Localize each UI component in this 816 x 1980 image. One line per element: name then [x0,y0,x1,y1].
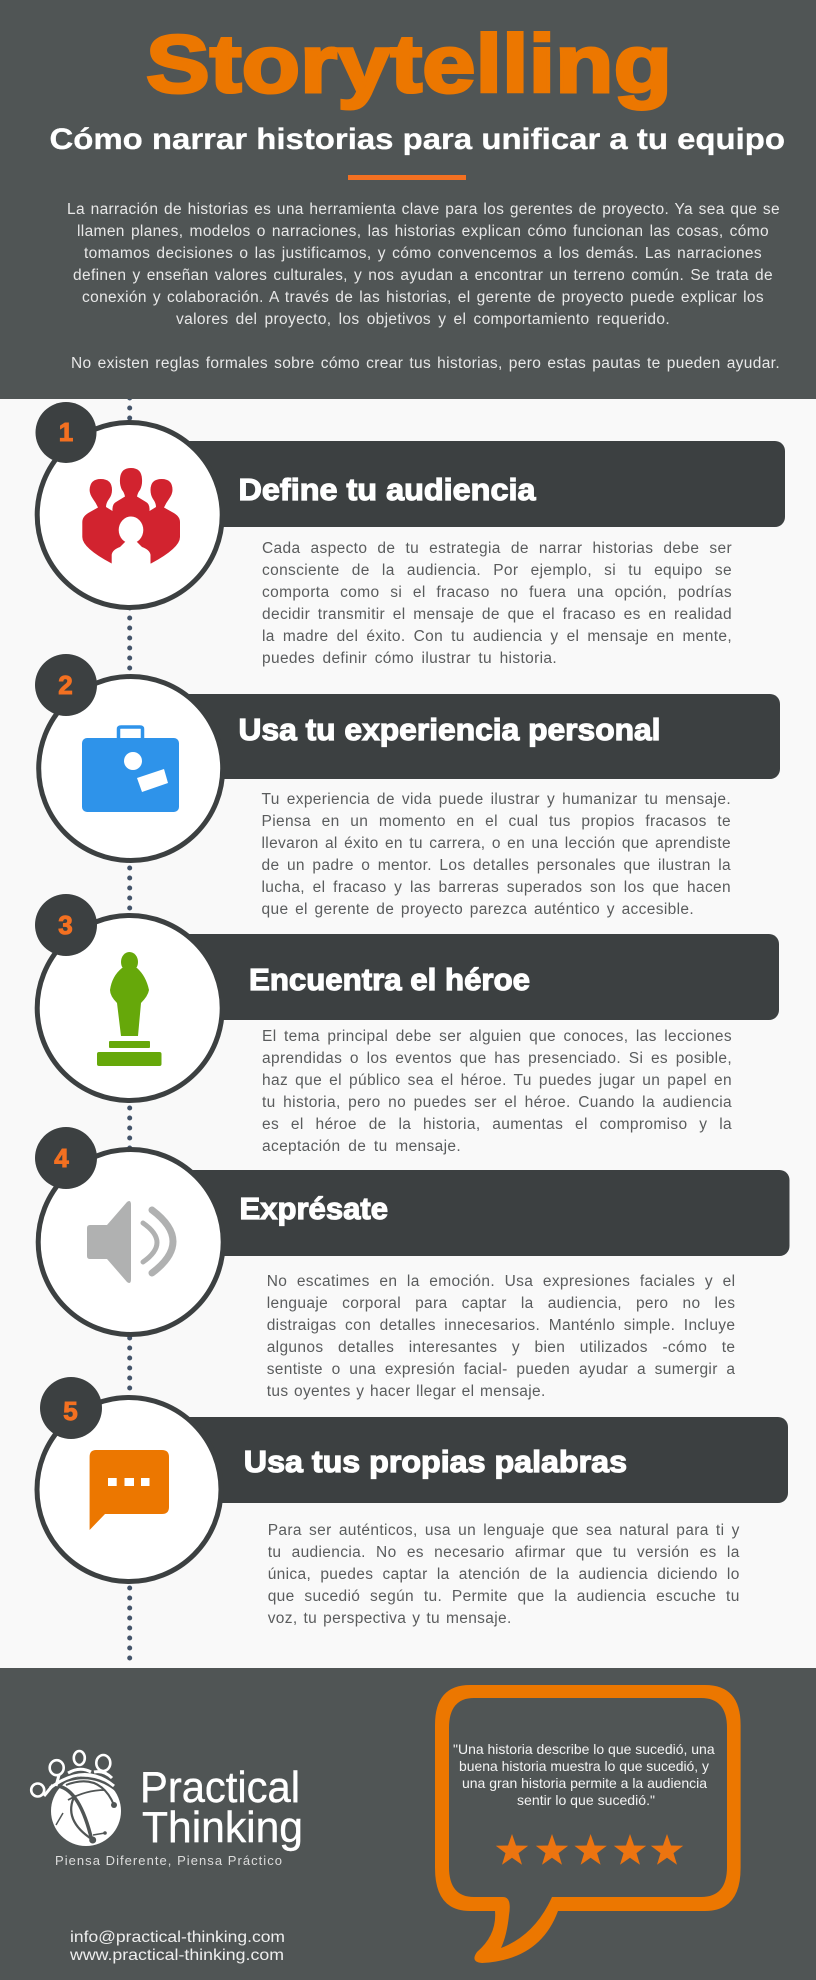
contact details: info@practical-thinking.com [70,1929,285,1946]
intro text: llamen planes, modelos o narraciones, las historias explican cómo funcionan las cosas, cómo [77,223,769,240]
intro text: No existen reglas formales sobre cómo crear tus historias, pero estas pautas te pueden ayudar. [71,355,780,372]
circle 4 [38,1150,223,1334]
text: step 5: que sucedió según tu. Permite que la audiencia escuche tu [268,1588,740,1605]
text: step 4: sentiste o una expresión facial- pueden ayudar a sumergir a [267,1361,735,1378]
text: step 2: Tu experiencia de vida puede ilustrar y humanizar tu mensaje. [262,791,731,808]
text: step 4: distraigas con detalles innecesarios. Manténlo simple. Incluye [267,1317,735,1334]
text: step 4: lenguaje corporal para captar la audiencia, pero no les [267,1295,735,1312]
icon: speaker [87,1201,173,1283]
orange rule [348,175,466,180]
heading bar 5 [150,1417,788,1503]
text: step 3 [262,1028,732,1155]
five stars rating [496,1834,683,1865]
badge 3 [35,894,97,956]
panel: step 2 [35,654,780,918]
text: step 5: voz, tu perspectiva y tu mensaje. [268,1610,512,1627]
contact details: www.practical-thinking.com [69,1947,284,1964]
icon: speech bubble [90,1450,169,1530]
intro text: definen y enseñan valores culturales, y nos ayudan a encontrar un terreno común. Se trata de [73,267,773,284]
text: step 1: comporta como si el fracaso no fuera una opción, podrías [262,584,732,601]
text: step 3: aceptación de tu mensaje. [262,1138,461,1155]
text: step 2: que el gerente de proyecto parezca auténtico y accesible. [262,901,694,918]
text: step 1: puedes definir cómo ilustrar tu historia. [262,650,557,667]
intro text [67,201,780,372]
badge 4: 4 [54,1143,69,1173]
circle 1 [37,422,222,608]
text: step 1 [262,540,732,667]
panel: step 1 [34,402,785,667]
text: step 1: decidir transmitir el mensaje de que el fracaso es en realidad [262,606,732,623]
text: step 4: algunos detalles interesantes y bien utilizados -cómo te [267,1339,735,1356]
logo: Practical Thinking: Thinking [142,1803,303,1852]
icon: audience [82,468,180,565]
text: step 3: haz que el público sea el héroe. Tu puedes jugar un papel en [262,1072,732,1089]
badge 4 [35,1127,97,1189]
subtitle: Cómo narrar historias para unificar a tu equipo [50,123,785,156]
logo: Practical Thinking: Practical [140,1763,300,1812]
badge 2 [35,654,97,716]
text: step 1: la madre del éxito. Con tu audiencia y el mensaje en mente, [262,628,732,645]
panel: step 5 [34,1377,788,1627]
badge 3: 3 [58,910,73,940]
heading: Usa tus propias palabras: Usa tus propias palabras [244,1444,627,1479]
badge 2: 2 [58,670,73,700]
intro text: valores del proyecto, los objetivos y el comportamiento requerido. [176,311,670,328]
heading bar 3 [150,934,779,1020]
badge 5: 5 [63,1396,78,1426]
circle 3 [37,916,222,1100]
panel: steps background with dotted timeline [0,399,816,1668]
quote text: buena historia muestra lo que sucedió, y [459,1758,709,1774]
intro text: conexión y colaboración. A través de las historias, el gerente de proyecto puede explicar los [82,289,764,306]
text: step 3: es el héroe de la historia, aumentas el compromiso y la [262,1116,732,1133]
circle 2 [39,676,223,860]
text: step 3: aprendidas o los eventos que has presenciado. Si es posible, [262,1050,732,1067]
text: step 2: llevaron al éxito en tu carrera, o en una lección que aprendiste [262,835,731,852]
text: step 4 [267,1273,735,1400]
heading: Define tu audiencia: Define tu audiencia [238,472,536,507]
heading: Encuentra el héroe: Encuentra el héroe [249,962,530,997]
quote text: sentir lo que sucedió." [517,1792,655,1808]
title: Storytelling [146,19,672,110]
text: step 3: El tema principal debe ser alguien que conoces, las lecciones [262,1028,732,1045]
text: step 5: Para ser auténticos, usa un lenguaje que sea natural para ti y [268,1522,740,1539]
icon: briefcase [82,727,179,812]
badge 5 [40,1377,102,1439]
heading: Usa tu experiencia personal: Usa tu experiencia personal [238,712,660,747]
text: step 5 [268,1522,740,1627]
panel: header [0,0,816,399]
quote text [453,1741,715,1808]
badge 1 [36,402,96,463]
panel: step 4 [35,1127,790,1400]
text: step 2: Piensa en un momento en el cual tus propios fracasos te [262,813,731,830]
quote text: "Una historia describe lo que sucedió, una [453,1741,715,1757]
heading bar 2 [150,694,780,779]
text: step 1: consciente de la audiencia. Por ejemplo, si tu equipo se [262,562,732,579]
heading: Exprésate: Exprésate [240,1191,388,1226]
heading bar 1 [150,441,785,527]
circle 5 [37,1398,221,1582]
text: step 4: tus oyentes y hacer llegar el mensaje. [267,1383,546,1400]
quote text: una gran historia permite a la audiencia [462,1775,707,1791]
text: step 2: de un padre o mentor. Los detalles personales que ilustran la [262,857,731,874]
text: step 2 [262,791,731,918]
text: step 3: tu historia, pero no puedes ser el héroe. Cuando la audiencia [262,1094,732,1111]
text: step 4: No escatimes en la emoción. Usa expresiones faciales y el [267,1273,735,1290]
quote speech bubble [435,1685,741,1963]
text: step 5: única, puedes captar la atención de la audiencia diciendo lo [268,1566,740,1583]
text: step 1: Cada aspecto de tu estrategia de narrar historias debe ser [262,540,732,557]
badge 1: 1 [59,417,73,447]
contact details [69,1929,285,1964]
text: step 2: lucha, el fracaso y las barreras superados son los que hacen [262,879,731,896]
panel: footer [0,1668,816,1980]
logo: Practical Thinking: Piensa Diferente, Piensa Práctico [55,1853,282,1868]
text: step 5: tu audiencia. No es necesario afirmar que tu versión es la [268,1544,740,1561]
intro text: La narración de historias es una herramienta clave para los gerentes de proyecto. Ya sea que se [67,201,780,218]
heading bar 4 [150,1170,790,1256]
icon: hero statue [97,952,162,1066]
intro text: tomamos decisiones o las justificamos, y cómo convencemos a los demás. Las narraciones [84,245,762,262]
panel: step 3 [34,894,779,1155]
logo: Practical Thinking [31,1751,303,1868]
